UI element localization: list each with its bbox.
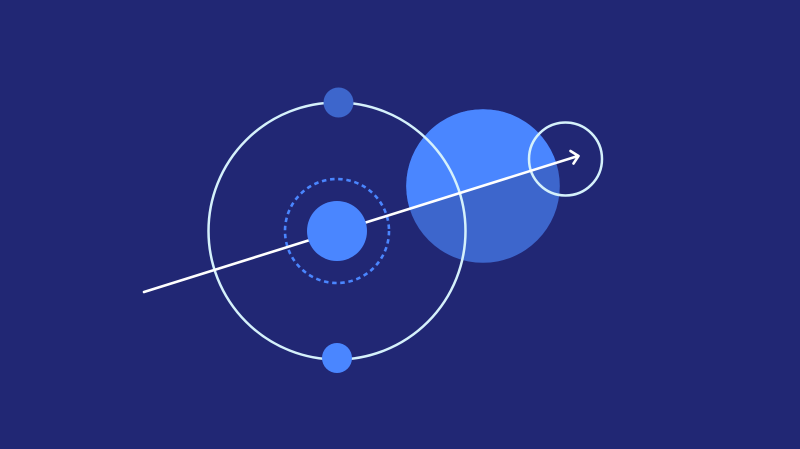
- arrowhead: [570, 151, 578, 164]
- orbit diagram: [142, 88, 604, 373]
- central planet: [307, 201, 367, 261]
- dashed inner orbit: [285, 179, 389, 283]
- bottom satellite: [322, 343, 352, 373]
- outer orbit ring: [208, 102, 466, 360]
- top satellite: [324, 88, 354, 118]
- small target ring: [529, 122, 602, 196]
- arrow shaft: [144, 156, 578, 292]
- large circle: upper brighter half: [406, 109, 556, 208]
- arrow: [144, 151, 578, 292]
- large circle: lower darker half: [406, 109, 560, 263]
